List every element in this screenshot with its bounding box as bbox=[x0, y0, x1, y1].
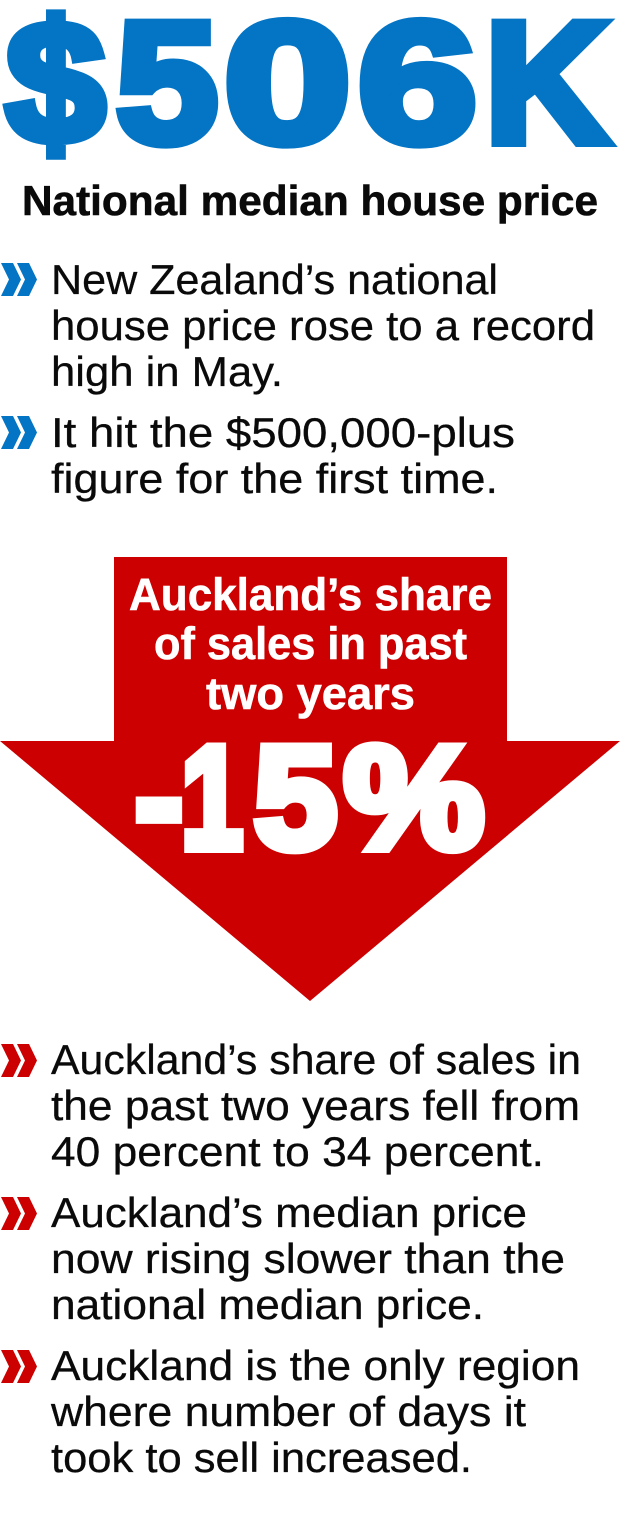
bullet block: Auckland bbox=[1, 1036, 581, 1481]
arrow heading bbox=[129, 569, 492, 719]
text: share of sales: Auckland’s share of sales in bbox=[51, 1036, 581, 1083]
percentage figure bbox=[135, 716, 484, 879]
text: record high: house price rose to a record bbox=[51, 302, 595, 349]
icon: blue chevrons bbox=[1, 263, 37, 296]
text: $500,000-plus bbox=[51, 409, 515, 502]
percentage figure: 1 bbox=[181, 716, 243, 879]
percentage figure: % bbox=[344, 716, 484, 879]
text: days to sell: Auckland is the only region bbox=[51, 1342, 580, 1389]
text: days to sell: took to sell increased. bbox=[51, 1434, 472, 1481]
subtitle: National median house price bbox=[22, 177, 598, 224]
bullet block: national bbox=[1, 256, 595, 502]
headline figure bbox=[6, 0, 609, 179]
text: median price: national median price. bbox=[51, 1281, 484, 1328]
icon: red chevrons bbox=[1, 1044, 37, 1077]
text: days to sell: where number of days it bbox=[50, 1388, 526, 1435]
percentage figure: - bbox=[135, 716, 183, 879]
arrow heading: of sales in past bbox=[154, 618, 467, 669]
text: median price: now rising slower than the bbox=[51, 1235, 565, 1282]
text: median price bbox=[51, 1189, 565, 1328]
arrow heading: two years bbox=[206, 668, 415, 719]
icon: blue chevrons bbox=[1, 416, 37, 449]
panel: red down arrow bbox=[0, 557, 620, 1001]
text: share of sales bbox=[51, 1036, 581, 1175]
text: days to sell bbox=[50, 1342, 580, 1481]
text: record high bbox=[51, 256, 595, 395]
arrow heading: Auckland’s share bbox=[129, 569, 492, 620]
text: $500,000-plus: figure for the first time. bbox=[51, 455, 498, 502]
text: share of sales: 40 percent to 34 percent. bbox=[51, 1128, 544, 1175]
icon: red chevrons bbox=[1, 1350, 37, 1383]
arrow shape bbox=[0, 557, 620, 1001]
text: record high: high in May. bbox=[51, 348, 283, 395]
icon: red chevrons bbox=[1, 1197, 37, 1230]
text: $500,000-plus: It hit the $500,000-plus bbox=[51, 409, 515, 456]
percentage figure: 5 bbox=[254, 716, 337, 879]
text: share of sales: the past two years fell from bbox=[51, 1082, 580, 1129]
text: record high: New Zealand’s national bbox=[51, 256, 498, 303]
text: median price: Auckland’s median price bbox=[51, 1189, 527, 1236]
